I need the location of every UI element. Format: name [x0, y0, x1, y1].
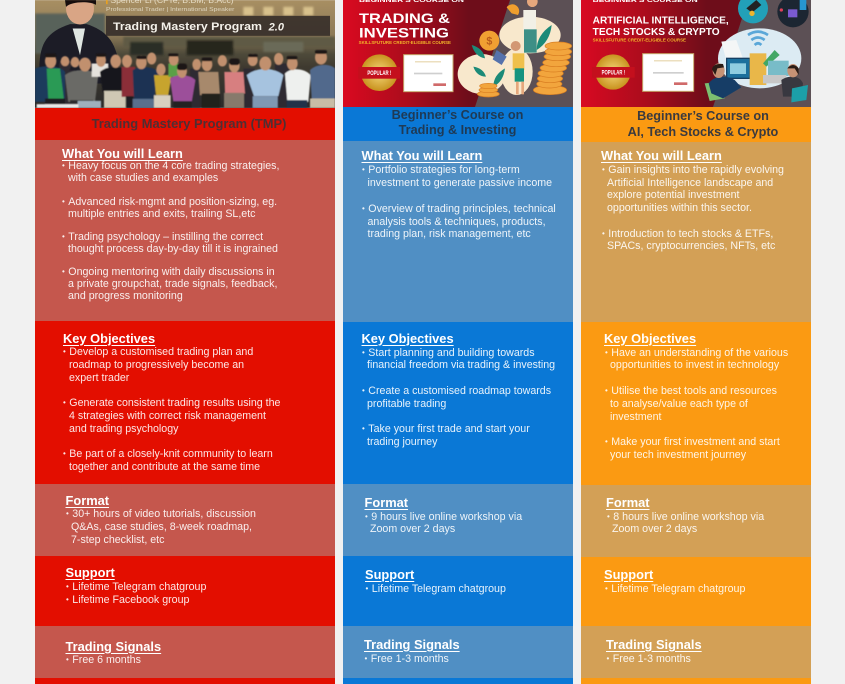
bullet list: expert trader	[69, 372, 129, 384]
heading: Format	[364, 495, 408, 510]
bullet list: •	[602, 164, 605, 174]
panel: T&I What You will Learn	[343, 141, 573, 322]
bullet list: Start planning and building towards	[368, 347, 535, 359]
bullet list: Trading psychology – instilling the correct	[68, 231, 263, 243]
bullet list: thought process day-by-day till it is ingrained	[68, 243, 278, 255]
bullet list: Zoom over 2 days	[612, 523, 697, 535]
course title	[593, 0, 729, 43]
panel: T&I Trading Signals	[343, 626, 573, 678]
panel: AI column header	[581, 107, 811, 142]
bullet list: •	[62, 232, 65, 241]
panel: T&I Format	[343, 484, 573, 556]
bullet list: investment	[610, 410, 661, 422]
investing illustration	[458, 0, 572, 97]
bullet list: with case studies and examples	[68, 172, 218, 184]
bullet: •	[605, 584, 608, 593]
bullet list	[602, 164, 784, 252]
heading: Trading Signals	[66, 639, 161, 654]
bullet list: •	[362, 386, 365, 395]
heading: Trading Signals	[606, 637, 702, 652]
bullet list: roadmap to progressively become an	[69, 359, 244, 371]
course title: INVESTING	[359, 24, 449, 40]
bullet: Free 1-3 months	[613, 652, 691, 664]
bullet list: •	[66, 509, 69, 518]
bullet list: 8 hours live online workshop via	[613, 510, 764, 522]
panel: Trading & Investing column header	[343, 107, 573, 141]
panel: AI Format	[581, 485, 811, 557]
bullet: Free 6 months	[72, 654, 141, 666]
bullet list: profitable trading	[367, 398, 446, 410]
heading: Trading Signals	[364, 637, 460, 652]
bullet list: Utilise the best tools and resources	[611, 385, 777, 397]
panel: AI Support	[581, 557, 811, 626]
bullet list: 7-step checklist, etc	[71, 534, 164, 546]
heading: What You will Learn	[601, 148, 722, 163]
heading: Trading Mastery Program (TMP): Trading Mastery Program (TMP)	[92, 116, 286, 131]
bullet list: opportunities to invest in technology	[610, 359, 779, 371]
heading: What You will Learn	[362, 148, 482, 163]
heading: Key Objectives	[63, 331, 155, 346]
bullet list: trading journey	[367, 436, 437, 448]
banner title	[106, 16, 330, 36]
bullet: Lifetime Telegram chatgroup	[372, 583, 506, 595]
heading: Beginner's Course on Trading & Investing: Trading & Investing	[399, 123, 516, 137]
bullet list: •	[605, 348, 608, 357]
bullet list: •	[362, 424, 365, 433]
bullet list: financial freedom via trading & investing	[367, 359, 555, 371]
popular badge: POPULAR !	[602, 71, 625, 77]
bullet list: and trading psychology	[69, 423, 178, 435]
bullet list: Portfolio strategies for long-term	[368, 164, 520, 176]
bullet list: Advanced risk-mgmt and position-sizing, eg.	[68, 196, 277, 208]
heading: What You will Learn	[62, 146, 183, 161]
heading: Beginner's Course on AI, Tech Stocks & Crypto: Beginner’s Course on	[637, 109, 769, 123]
bullet list: Overview of trading principles, technical	[368, 202, 556, 214]
panel: AI Trading Signals	[581, 626, 811, 678]
bullet list: •	[602, 228, 605, 238]
popular badge	[358, 54, 400, 91]
banner title: Trading Mastery Program	[113, 21, 262, 33]
bullet list: explore potential investment	[607, 189, 740, 201]
bullet list: a private groupchat, trade signals, feedback,	[68, 278, 277, 290]
course banner: Trading & Investing	[343, 0, 573, 107]
course title: TRADING &	[359, 10, 450, 26]
bullet list: •	[63, 398, 66, 407]
bullet list: trading plan, risk management, etc	[368, 228, 531, 240]
bullet list	[605, 347, 788, 461]
heading: Support	[365, 567, 414, 582]
bullet list: Generate consistent trading results using the	[69, 397, 280, 409]
bullet list: analysis tools & techniques, products,	[368, 216, 546, 228]
bullet list: Be part of a closely-knit community to learn	[69, 448, 273, 460]
popular badge: POPULAR !	[367, 70, 391, 77]
bullet list: Develop a customised trading plan and	[69, 346, 253, 358]
banner title: 2.0	[268, 22, 285, 34]
presenter caption	[106, 0, 234, 13]
bullet list: •	[62, 197, 65, 206]
panel: TMP Key Objectives	[35, 321, 335, 484]
bullet list: together and contribute at the same time	[69, 461, 260, 473]
popular badge	[592, 54, 635, 90]
bullet list: Create a customised roadmap towards	[368, 385, 551, 397]
bullet list: investment to generate passive income	[368, 177, 552, 189]
bullet list	[362, 164, 556, 240]
bullet list: •	[362, 165, 365, 174]
bullet list: Have an understanding of the various	[611, 347, 788, 359]
bullet: Lifetime Telegram chatgroup	[611, 583, 745, 595]
bullet list	[607, 510, 764, 535]
bullet list: Ongoing mentoring with daily discussions in	[68, 266, 275, 278]
bullet list	[66, 508, 256, 546]
course banner: AI, Tech Stocks & Crypto	[581, 0, 811, 107]
bullet list: •	[362, 204, 365, 212]
panel: Trading Mastery Program column header	[35, 108, 335, 140]
bullet list: Artificial Intelligence landscape and	[607, 176, 773, 188]
bullet: •	[366, 584, 368, 593]
bullet list: •	[605, 386, 608, 395]
bullet list: •	[62, 267, 65, 276]
heading: Beginner's Course on Trading & Investing: Beginner’s Course on	[392, 108, 523, 122]
bullet list: Make your first investment and start	[611, 436, 780, 448]
bullet list	[362, 347, 555, 448]
bullet list: •	[66, 582, 69, 591]
heading: Beginner's Course on Trading & Investing	[392, 108, 523, 137]
bullet list: •	[66, 594, 69, 604]
technology illustration	[705, 0, 809, 102]
bullet list: •	[365, 512, 368, 520]
bullet list: Heavy focus on the 4 core trading strategies,	[68, 160, 279, 172]
panel: TMP Format	[35, 484, 335, 556]
bullet list: Introduction to tech stocks & ETFs,	[608, 228, 773, 240]
presenter	[39, 0, 119, 84]
bullet list: •	[63, 347, 66, 356]
heading: Support	[604, 567, 653, 582]
bullet list: •	[607, 512, 610, 520]
panel: TMP Support	[35, 556, 335, 626]
course title: TECH STOCKS & CRYPTO	[593, 27, 720, 38]
investing illustration: $	[486, 36, 492, 48]
panel: T&I Key Objectives	[343, 322, 573, 484]
course title: SKILLSFUTURE CREDIT-ELIGIBLE COURSE	[593, 38, 686, 43]
bullet: •	[364, 654, 367, 662]
bullet list: 30+ hours of video tutorials, discussion	[72, 508, 256, 520]
bullet list: Q&As, case studies, 8-week roadmap,	[71, 521, 252, 533]
panel: AI What You will Learn	[581, 142, 811, 322]
bullet list: Lifetime Telegram chatgroup	[72, 581, 206, 593]
bullet: •	[66, 655, 69, 664]
bullet list: Gain insights into the rapidly evolving	[608, 164, 784, 176]
heading: Key Objectives	[604, 331, 696, 346]
bullet list: 9 hours live online workshop via	[371, 510, 522, 522]
bullet list: opportunities within this sector.	[607, 202, 752, 214]
bullet list: •	[362, 348, 365, 357]
bullet list: Take your first trade and start your	[368, 423, 530, 435]
bullet list: •	[63, 449, 66, 458]
heading: Support	[66, 565, 115, 580]
course title	[359, 0, 464, 45]
heading: Beginner's Course on AI, Tech Stocks & Crypto	[628, 109, 778, 138]
group of students	[35, 50, 335, 108]
bullet list: to analyse/value each type of	[610, 398, 748, 410]
course title: SKILLSFUTURE CREDIT-ELIGIBLE COURSE	[359, 40, 451, 45]
panel: TMP What You will Learn	[35, 140, 335, 321]
bullet list: SPACs, cryptocurrencies, NFTs, etc	[607, 240, 775, 252]
heading: Format	[606, 495, 650, 510]
photo banner: Trading Mastery Program	[35, 0, 335, 108]
bullet list: Lifetime Facebook group	[72, 594, 189, 606]
bullet list	[365, 510, 522, 535]
bullet list: multiple entries and exits, trailing SL,etc	[68, 208, 255, 220]
bullet list	[66, 581, 206, 606]
bullet list	[63, 346, 280, 473]
panel: AI footer band	[581, 678, 811, 684]
panel: T&I footer band	[343, 678, 573, 684]
panel: TMP footer band	[35, 678, 335, 684]
heading: Format	[66, 493, 109, 508]
bullet list: •	[62, 161, 65, 170]
panel: T&I Support	[343, 556, 573, 626]
heading: Key Objectives	[362, 331, 454, 346]
bullet list: Zoom over 2 days	[370, 523, 455, 535]
presenter caption: Professional Trader | International Speaker	[106, 7, 234, 13]
heading: Beginner's Course on AI, Tech Stocks & Crypto: AI, Tech Stocks & Crypto	[628, 124, 778, 138]
bullet list: 4 strategies with correct risk management	[69, 410, 266, 422]
bullet list: and progress monitoring	[68, 290, 183, 302]
bullet: •	[606, 654, 609, 662]
certificate	[404, 55, 453, 92]
bullet list: your tech investment journey	[610, 449, 746, 461]
panel: TMP Trading Signals	[35, 626, 335, 678]
certificate	[643, 54, 694, 91]
bullet list	[62, 160, 279, 302]
course title: ARTIFICIAL INTELLIGENCE,	[593, 15, 729, 26]
bullet: Free 1-3 months	[371, 652, 449, 664]
bullet list: •	[605, 437, 608, 446]
panel: AI Key Objectives	[581, 322, 811, 485]
